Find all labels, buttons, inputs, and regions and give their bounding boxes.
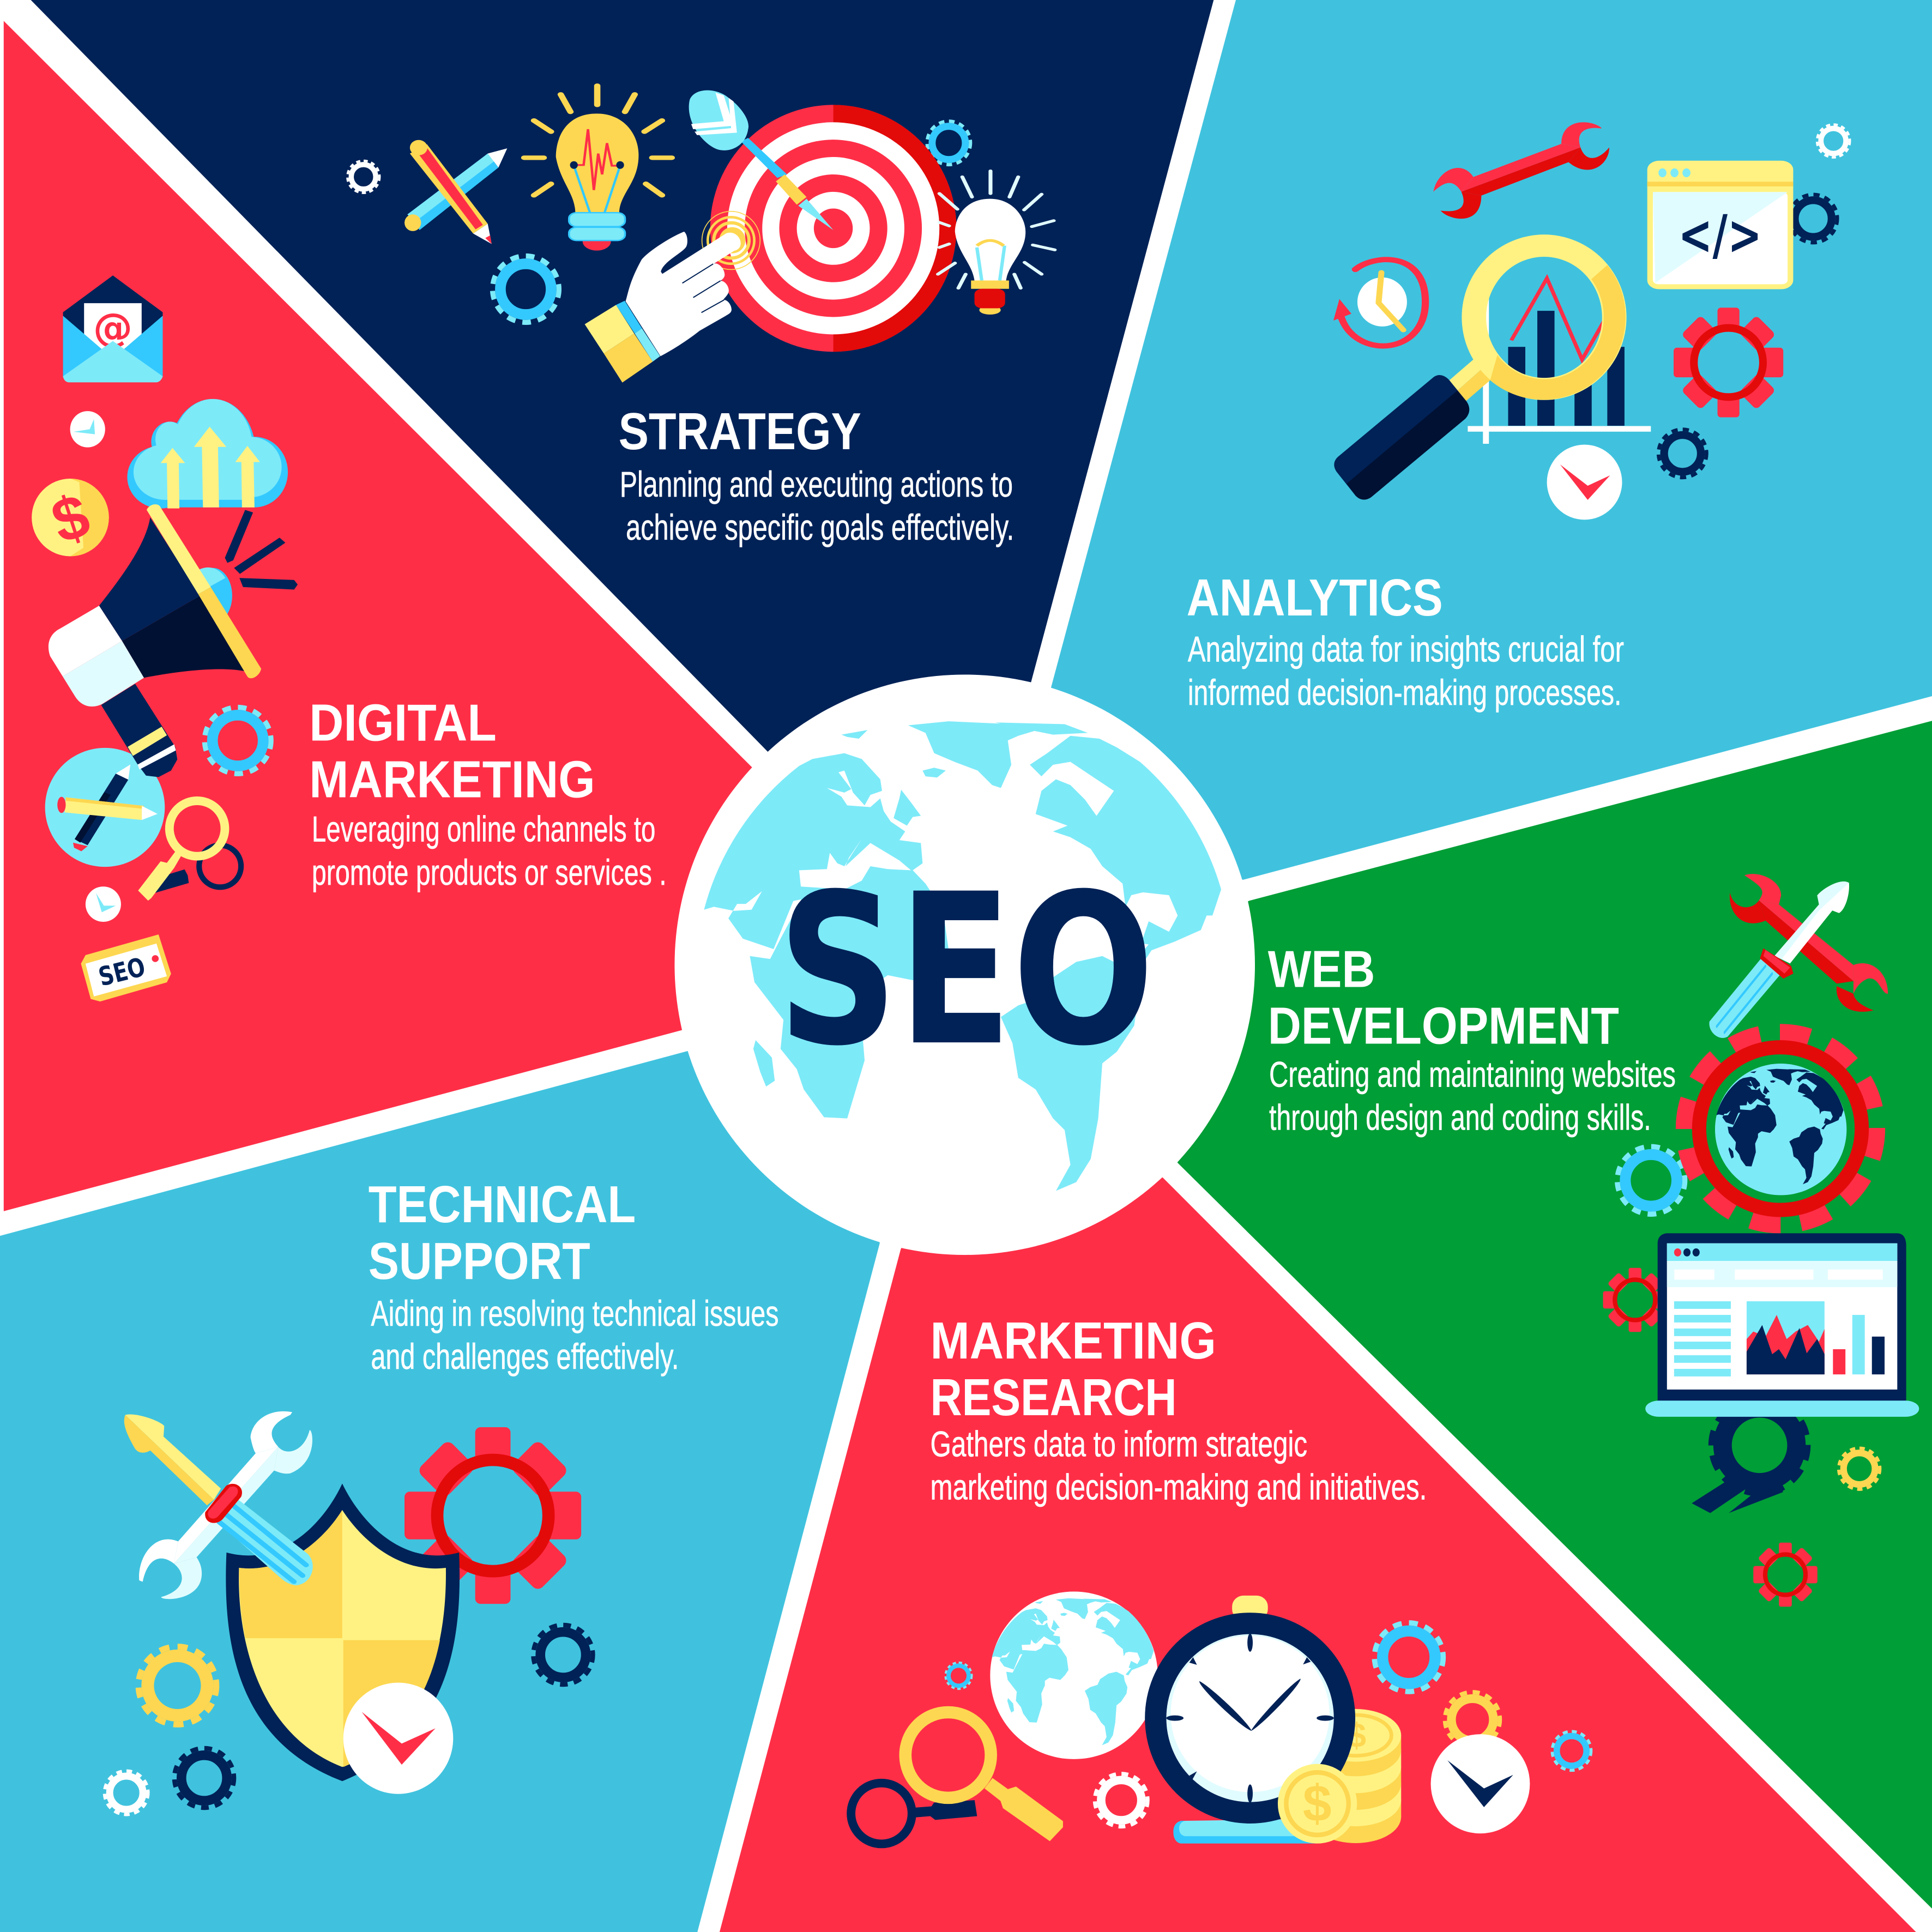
icon: white gear	[347, 161, 379, 193]
icon: yellow magnifier handle	[138, 850, 182, 901]
icon: wrench	[1433, 122, 1609, 219]
icon: yellow lightbulb	[524, 86, 672, 251]
heading: marketing research	[930, 1312, 1216, 1427]
icon: small navy gear	[1658, 430, 1706, 478]
icon: coin	[32, 479, 109, 556]
text: marketing research description	[930, 1424, 1427, 1507]
text: digital marketing description: Leveraging online channels to	[312, 810, 655, 849]
icon: target	[710, 105, 956, 352]
text: technical support description: Aiding in resolving technical issues	[371, 1294, 778, 1333]
icon: seo tag	[81, 934, 171, 1001]
icon: blue gear	[204, 707, 271, 774]
icon: stopwatch	[1145, 1596, 1355, 1824]
icon: wrench	[139, 1411, 312, 1599]
icon: white lightbulb	[938, 171, 1055, 315]
icon: red gear	[404, 1427, 581, 1604]
text: digital marketing description	[312, 810, 667, 892]
heading: web development: WEB	[1268, 940, 1375, 998]
icon: small blue gear	[1552, 1731, 1591, 1770]
heading: strategy: STRATEGY	[619, 402, 861, 461]
panel: web development	[1047, 721, 1932, 1909]
icon: screwdriver	[1709, 882, 1849, 1038]
icon: magnifier rings	[170, 801, 241, 887]
icon: dollar symbol: $	[44, 480, 98, 557]
text: digital marketing description: promote products or services .	[312, 853, 667, 892]
panel: analytics	[986, 0, 1932, 880]
icon: navy gear lower	[174, 1748, 234, 1808]
text: analytics description: informed decision-making processes.	[1188, 673, 1621, 713]
icon: marketing artwork	[32, 316, 298, 1001]
icon: yellow gear	[1445, 1692, 1500, 1747]
heading: technical support	[369, 1175, 636, 1290]
icon: navy gear right	[533, 1625, 593, 1685]
text: web development description	[1269, 1054, 1676, 1138]
icon: coin stack	[1310, 1709, 1401, 1843]
icon: megaphone	[49, 504, 298, 777]
icon: white gear	[1095, 1774, 1148, 1827]
icon: clock with arrow	[1333, 259, 1426, 346]
heading: digital marketing: MARKETING	[309, 750, 595, 808]
icon: magnifying glasses	[851, 1712, 1063, 1844]
icon: blue gear	[492, 256, 559, 322]
icon: small blue gear	[927, 121, 970, 165]
icon: strategy artwork	[404, 86, 956, 352]
text: web development description: through design and coding skills.	[1269, 1098, 1651, 1138]
icon: small clock bottom	[86, 886, 121, 922]
heading: technical support: TECHNICAL	[369, 1175, 636, 1234]
text: strategy description	[620, 464, 1014, 547]
icon: seo tag dot	[152, 955, 159, 962]
icon: lower red gear	[1753, 1543, 1818, 1607]
icon: pointing hand	[585, 212, 760, 383]
icon: navy magnifier handle	[154, 870, 189, 893]
icon: check badge	[1547, 445, 1622, 520]
panel: technical support	[0, 986, 880, 1932]
icon: white gear	[105, 1771, 148, 1815]
heading: analytics: ANALYTICS	[1187, 569, 1443, 627]
text: strategy description: Planning and executing actions to	[620, 464, 1013, 504]
icon: dart	[689, 90, 834, 230]
icon: navy gear with tail	[1692, 1398, 1806, 1513]
icon: crossed pencils	[404, 140, 507, 244]
icon: seo tag label: SEO	[96, 952, 148, 993]
icon: at symbol: @	[93, 305, 132, 351]
icon: cloud upload	[127, 399, 288, 509]
icon: dollar on front coin: $	[1303, 1775, 1332, 1833]
text: technical support description: and challenges effectively.	[371, 1337, 679, 1376]
icon: yellow gear	[138, 1646, 216, 1724]
icon: email envelope front	[63, 316, 162, 382]
icon: front coin	[1278, 1764, 1357, 1844]
heading: marketing research: MARKETING	[930, 1312, 1216, 1370]
text: marketing research description: Gathers data to inform strategic	[930, 1424, 1307, 1464]
icon: blue gear	[1374, 1623, 1443, 1692]
text: web development description: Creating and maintaining websites	[1269, 1055, 1676, 1095]
icon: magnifying glass	[1334, 234, 1627, 499]
icon: wrench	[1730, 874, 1888, 1012]
icon: code symbol: </>	[1678, 204, 1762, 267]
icon: pencil bubble	[45, 748, 165, 867]
icon: check badge	[1431, 1734, 1530, 1833]
icon: screwdriver	[124, 1415, 313, 1585]
icon: red gear	[1674, 307, 1783, 418]
text: analytics description	[1188, 630, 1624, 713]
icon: small red gear	[1603, 1268, 1667, 1332]
icon: yellow gear	[1839, 1448, 1880, 1489]
panel: strategy	[31, 0, 1213, 862]
bar chart	[1468, 279, 1651, 444]
icon: tiny blue gear	[945, 1663, 972, 1689]
icon: stopwatch base	[1173, 1819, 1317, 1844]
heading: marketing research: RESEARCH	[930, 1368, 1176, 1427]
title: SEO: SEO	[777, 849, 1155, 1092]
icon: analytics artwork	[1333, 122, 1793, 520]
icon: large red gear with earth	[1685, 1033, 1876, 1225]
heading: digital marketing	[309, 693, 595, 808]
heading: technical support: SUPPORT	[369, 1232, 590, 1290]
icon: support artwork	[124, 1411, 460, 1794]
heading: web development: DEVELOPMENT	[1268, 997, 1619, 1055]
icon: blue gear	[1617, 1146, 1685, 1214]
world map	[704, 721, 1221, 1191]
heading: web development	[1268, 940, 1619, 1055]
icon: navy gear behind window	[1789, 195, 1837, 243]
icon: check badge	[343, 1683, 453, 1794]
panel: digital marketing	[4, 21, 862, 1211]
panel: marketing research	[720, 1047, 1916, 1932]
heading: digital marketing: DIGITAL	[309, 693, 497, 752]
icon: laptop	[1645, 1233, 1919, 1417]
icon: tools and laptop artwork	[1645, 874, 1919, 1417]
text: technical support description	[371, 1294, 778, 1376]
icon: white gear	[1817, 125, 1850, 158]
icon: shield	[226, 1483, 460, 1781]
icon: small clock top	[70, 411, 105, 448]
icon: code window	[1647, 161, 1793, 289]
text: strategy description: achieve specific goals effectively.	[626, 508, 1014, 547]
text: analytics description: Analyzing data for insights crucial for	[1188, 630, 1624, 669]
icon: globe	[990, 1592, 1158, 1759]
text: marketing research description: marketing decision-making and initiatives.	[930, 1468, 1427, 1507]
icon: email envelope back	[63, 275, 162, 377]
icon: dollar on coin stack: $	[1347, 1717, 1366, 1755]
center circle: globe with SEO	[674, 674, 1255, 1255]
